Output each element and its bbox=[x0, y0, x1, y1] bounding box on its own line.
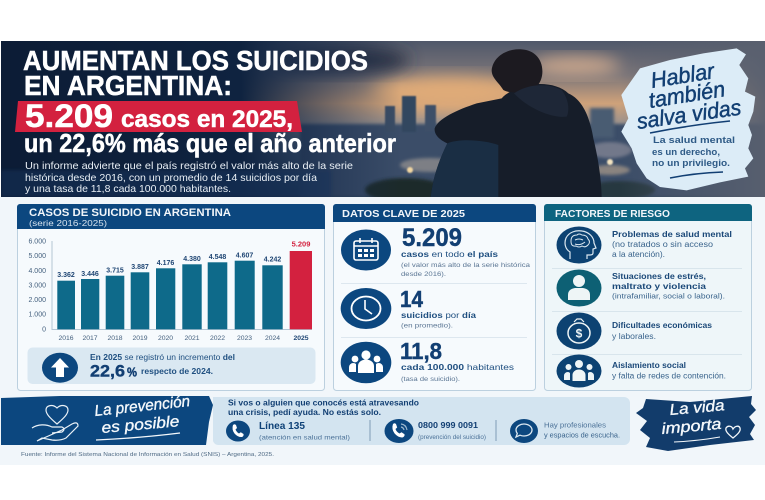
contact: 0800 bbox=[384, 419, 486, 443]
help message bbox=[228, 398, 419, 417]
hero description: histórica desde 2016, con un promedio de 14 suicidios por día bbox=[25, 173, 317, 184]
bar chart: 5.209 bbox=[292, 240, 310, 248]
icon: phone with signal bbox=[384, 419, 414, 443]
brush callout: Hablar también salva vidas: salva vidas bbox=[635, 95, 743, 134]
stat: 14 suicidios por día: 14 bbox=[400, 286, 423, 312]
hero description: Un informe advierte que el país registró el valor más alto de la serie bbox=[25, 161, 353, 172]
bar chart: 3.446 bbox=[81, 271, 99, 278]
slogan: La prevención bbox=[94, 393, 191, 420]
datos heading: DATOS CLAVE DE 2025 bbox=[342, 208, 465, 220]
factor: salud mental: a la atención). bbox=[612, 250, 665, 259]
callout: increase of 22.6%: % bbox=[127, 364, 137, 380]
bar chart: 2023 bbox=[237, 335, 252, 342]
page background bbox=[0, 197, 765, 465]
stat: 14 suicidios por día: suicidios por día bbox=[401, 310, 476, 320]
brush callout: Hablar también salva vidas: es un derecho, bbox=[652, 147, 720, 158]
badge: la vida importa: importa bbox=[661, 416, 723, 438]
contact: línea 135: Línea 135 bbox=[259, 420, 305, 432]
factor: salud mental bbox=[556, 226, 732, 264]
contact: línea 135 bbox=[226, 420, 350, 442]
hero description bbox=[25, 161, 353, 195]
bar chart: 4.000 bbox=[28, 268, 46, 275]
factor: aislamiento social: y falta de redes de contención. bbox=[612, 372, 726, 380]
icon: group bbox=[556, 354, 602, 388]
factores heading: FACTORES DE RIESGO bbox=[555, 208, 670, 220]
brush callout: Hablar también salva vidas: también bbox=[647, 76, 727, 113]
icon: head with brain bbox=[556, 226, 602, 264]
bar chart: 2020 bbox=[158, 335, 173, 342]
brush callout: Hablar también salva vidas: Hablar bbox=[649, 58, 718, 93]
icon: group of people bbox=[341, 342, 391, 383]
stat: 11,8 cada 100.000: cada 100.000 habitantes bbox=[401, 362, 514, 372]
stat: 5.209 casos: 5.209 bbox=[402, 224, 462, 252]
icon: speech bubble bbox=[510, 419, 538, 443]
factor: dificultades económicas: y laborales. bbox=[612, 332, 656, 341]
icon: money bag bbox=[556, 312, 602, 350]
bar chart: 0 bbox=[42, 326, 46, 334]
factor: salud mental: Problemas de salud mental bbox=[612, 229, 732, 239]
hero title: EN ARGENTINA: bbox=[24, 70, 232, 101]
help message: Si vos o alguien que conocés está atravesando bbox=[228, 398, 419, 408]
factor: aislamiento social bbox=[556, 354, 726, 388]
hero title bbox=[23, 45, 368, 101]
panel: ayuda bbox=[213, 397, 630, 445]
stat: 11,8 cada 100.000: (tasa de suicidio). bbox=[401, 376, 460, 383]
bar chart: 2017 bbox=[82, 335, 98, 342]
badge: la vida importa: La vida bbox=[669, 397, 726, 419]
bar chart: 3.715 bbox=[106, 268, 124, 274]
chart panel heading: CASOS DE SUICIDIO EN ARGENTINA bbox=[29, 207, 231, 219]
factor: estrés y violencia bbox=[556, 270, 725, 306]
factor: salud mental: (no tratados o sin acceso bbox=[612, 240, 714, 249]
panel: factores de riesgo bbox=[544, 204, 752, 390]
datos heading bbox=[333, 204, 536, 222]
hero subtitle: un 22,6% más que el año anterior bbox=[24, 128, 396, 158]
bar chart: 2.000 bbox=[28, 297, 46, 304]
slogan: es posible bbox=[101, 413, 180, 437]
factor: aislamiento social: Aislamiento social bbox=[612, 360, 686, 370]
bar chart: 6.000 bbox=[28, 238, 46, 246]
brush callout: Hablar también salva vidas bbox=[621, 48, 755, 190]
icon: clock bbox=[341, 288, 391, 329]
red highlight band: 5.209 bbox=[25, 98, 113, 134]
bar chart bbox=[28, 238, 312, 342]
hero banner bbox=[1, 41, 765, 202]
bar chart: 2018 bbox=[107, 335, 123, 342]
icon: up arrow bbox=[42, 353, 78, 383]
stat: 5.209 casos: (el valor más alto de la serie histórica bbox=[401, 262, 530, 269]
panel: casos de suicidio bbox=[17, 204, 325, 390]
brush callout: Hablar también salva vidas: no un privilegio. bbox=[652, 158, 730, 169]
callout: increase of 22.6%: respecto de 2024. bbox=[141, 366, 213, 376]
factor: estrés y violencia: (intrafamiliar, social o laboral). bbox=[612, 292, 725, 300]
bar chart: 2021 bbox=[184, 335, 200, 342]
contact: espacios de escucha: Hay profesionales bbox=[544, 420, 606, 430]
bar chart: 3.362 bbox=[57, 272, 75, 279]
callout: increase of 22.6%: En 2025 se registró un incremento del bbox=[90, 353, 235, 362]
hero title: AUMENTAN LOS SUICIDIOS bbox=[23, 45, 368, 76]
bar chart: 2016 bbox=[58, 335, 74, 342]
stat: 5.209 casos: casos en todo el país bbox=[401, 249, 498, 259]
bar chart: 2024 bbox=[265, 335, 280, 342]
stat: 14 suicidios por día bbox=[341, 286, 476, 330]
contact: línea 135: (atención en salud mental) bbox=[259, 434, 350, 442]
factor: dificultades económicas: Dificultades económicas bbox=[612, 320, 712, 330]
contact: 0800: 0800 999 0091 bbox=[418, 420, 478, 430]
stat: 14 suicidios por día: (en promedio). bbox=[401, 322, 453, 330]
chart panel heading bbox=[17, 204, 325, 229]
bar chart: 2022 bbox=[210, 335, 225, 342]
contact: espacios de escucha bbox=[510, 419, 620, 443]
contact: 0800: (prevención del suicidio) bbox=[418, 434, 486, 441]
stat: 5.209 casos bbox=[341, 224, 530, 278]
bar chart: 3.000 bbox=[28, 282, 46, 290]
factor: estrés y violencia: Situaciones de estrés, bbox=[612, 271, 706, 281]
bar chart: 4.548 bbox=[209, 254, 226, 261]
icon: calendar bbox=[341, 230, 391, 270]
icon: hand holding heart bbox=[32, 406, 78, 441]
stat: 11,8 cada 100.000: 11,8 bbox=[400, 338, 442, 364]
bar chart: 4.176 bbox=[157, 260, 174, 267]
stat: 11,8 cada 100.000 bbox=[341, 338, 514, 383]
bar chart: 4.607 bbox=[236, 252, 253, 260]
callout: increase of 22.6%: 22,6 bbox=[90, 362, 125, 380]
icon: money bag: $ bbox=[576, 326, 583, 340]
factores heading bbox=[544, 204, 752, 221]
bar chart: 2019 bbox=[132, 335, 148, 342]
bar chart: 2025 bbox=[293, 335, 309, 342]
panel: datos clave bbox=[333, 204, 536, 390]
chart panel heading: (serie 2016-2025) bbox=[29, 218, 107, 228]
brush callout: Hablar también salva vidas: La salud mental bbox=[653, 135, 735, 146]
factor: dificultades económicas bbox=[556, 312, 712, 350]
man silhouette bbox=[431, 49, 602, 197]
bar chart: 4.242 bbox=[264, 256, 281, 264]
bar chart: 5.000 bbox=[28, 253, 46, 260]
hero photo: man facing a city at dusk bbox=[1, 41, 765, 202]
bar chart: 3.887 bbox=[131, 264, 149, 271]
source note: Fuente: Informe del Sistema Nacional de Información en Salud (SNIS) – Argentina, 2025. bbox=[21, 452, 275, 458]
callout: increase of 22.6% bbox=[28, 348, 316, 384]
contact: espacios de escucha: y espacios de escucha. bbox=[544, 430, 620, 440]
stat: 5.209 casos: desde 2016). bbox=[401, 271, 446, 278]
badge: la vida importa bbox=[636, 396, 756, 451]
slogan bbox=[94, 393, 191, 437]
bar chart: 4.380 bbox=[183, 256, 201, 263]
red highlight band: casos en 2025, bbox=[121, 106, 293, 133]
hero description: y una tasa de 11,8 cada 100.000 habitantes. bbox=[25, 184, 231, 195]
icon: phone bbox=[226, 420, 250, 442]
help message: una crisis, pedí ayuda. No estás solo. bbox=[228, 407, 381, 417]
banner: la prevención es posible bbox=[1, 393, 213, 445]
bar chart: 1.000 bbox=[28, 312, 46, 318]
factor: estrés y violencia: maltrato y violencia bbox=[612, 281, 706, 291]
red highlight band bbox=[15, 98, 302, 134]
icon: person bbox=[556, 270, 602, 306]
